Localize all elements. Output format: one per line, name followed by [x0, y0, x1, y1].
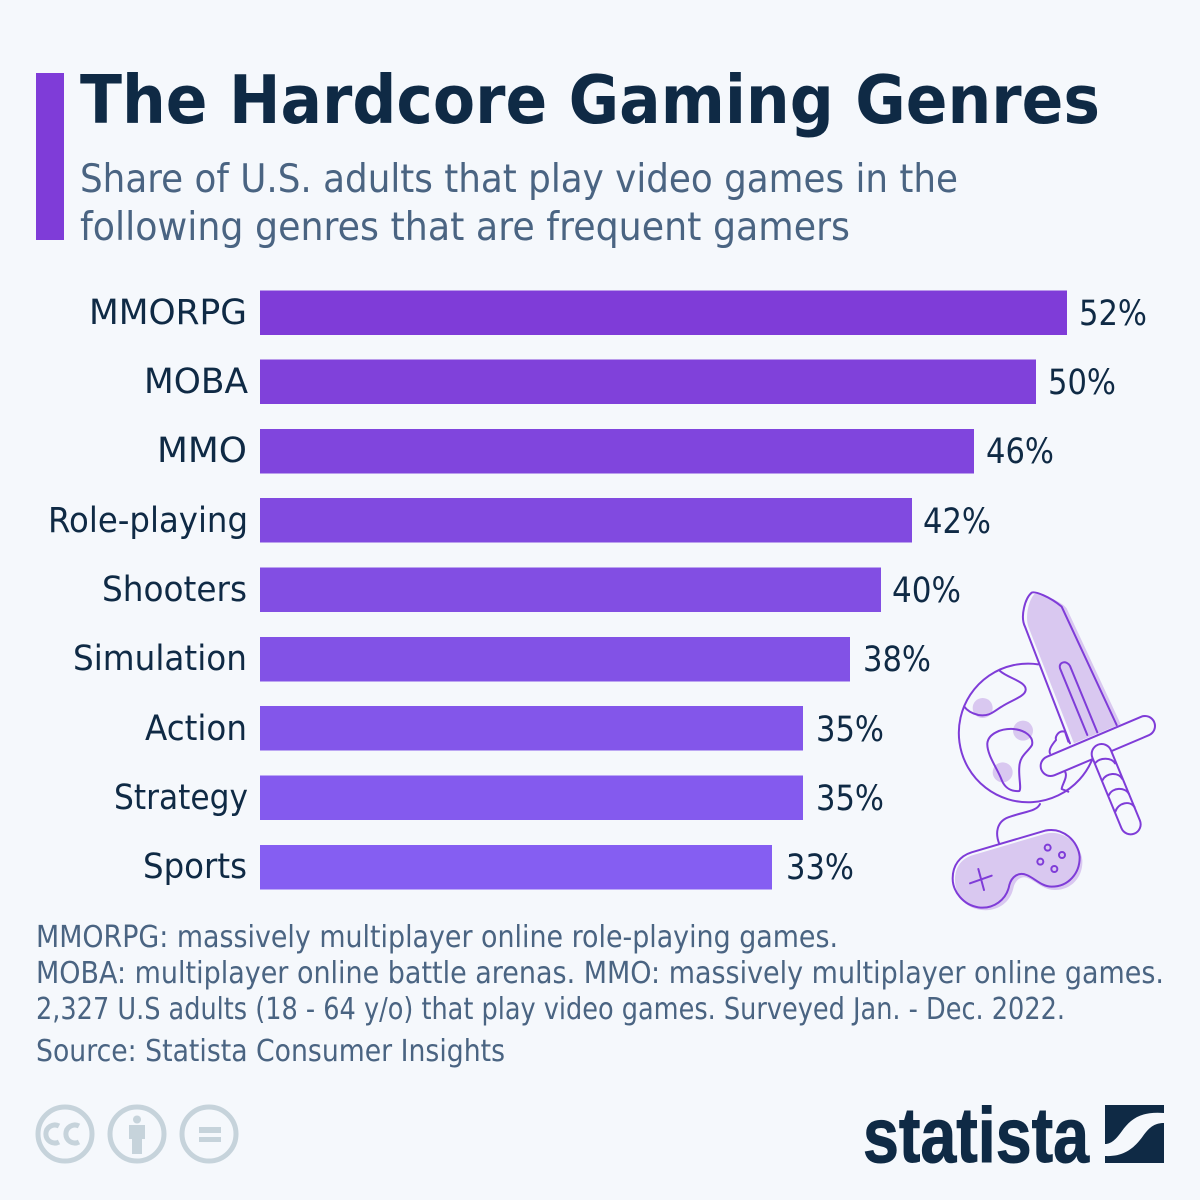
- subtitle: Share of U.S. adults that play video games in the: [80, 157, 958, 202]
- icon: statista mark: [1105, 1105, 1164, 1163]
- category labels: Shooters: [102, 570, 247, 610]
- value labels: 52%: [1079, 294, 1147, 334]
- value labels: 50%: [1048, 363, 1116, 403]
- icon: globe, sword and game controller: [953, 592, 1145, 910]
- value labels: 35%: [816, 779, 884, 819]
- category labels: Sports: [143, 847, 247, 887]
- value labels: 35%: [816, 710, 884, 750]
- value labels: 40%: [892, 571, 961, 611]
- statista logo: statista: [863, 1091, 1090, 1179]
- icon: sword handle: [1096, 754, 1135, 824]
- footnotes: MMORPG: massively multiplayer online role-playing games.: [36, 920, 838, 955]
- category labels: MMO: [157, 431, 247, 471]
- icon: no derivatives: [182, 1107, 236, 1161]
- value labels: 46%: [986, 432, 1054, 472]
- icon: cc license: [38, 1107, 92, 1161]
- icon: controller cable: [997, 804, 1040, 844]
- category labels: MMORPG: [89, 293, 247, 333]
- icon: sword blade: [1023, 592, 1121, 743]
- category labels: Strategy: [114, 778, 248, 818]
- source: Source: Statista Consumer Insights: [36, 1034, 505, 1069]
- category labels: Role-playing: [48, 501, 248, 541]
- title: The Hardcore Gaming Genres: [80, 61, 1100, 139]
- bars: [260, 290, 1067, 890]
- icon: sword guard: [1051, 726, 1145, 766]
- icon: attribution: [110, 1107, 164, 1161]
- icon: game controller: [953, 830, 1082, 910]
- category labels: Simulation: [73, 639, 247, 679]
- category labels: MOBA: [144, 362, 248, 402]
- value labels: 42%: [923, 502, 991, 542]
- value labels: 33%: [786, 848, 854, 888]
- category labels: [48, 293, 248, 887]
- value labels: [786, 294, 1147, 888]
- subtitle: following genres that are frequent gamers: [80, 205, 850, 250]
- subtitle: [80, 157, 958, 250]
- footnotes: [36, 920, 1164, 1027]
- bar chart: [48, 290, 1147, 890]
- value labels: 38%: [863, 640, 931, 680]
- title accent bar: [36, 73, 64, 240]
- icon: globe: [959, 664, 1093, 802]
- category labels: Action: [145, 709, 247, 749]
